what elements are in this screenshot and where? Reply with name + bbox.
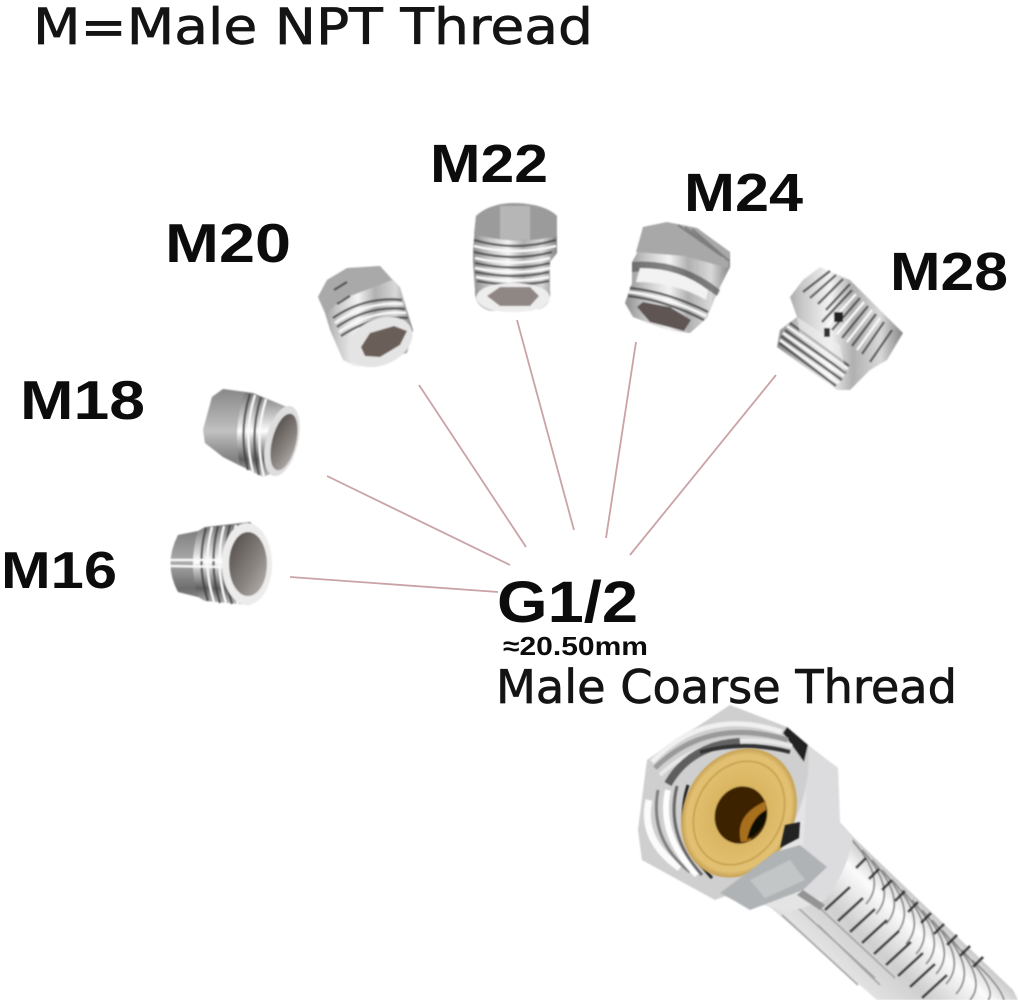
braided hose (745, 823, 1018, 1000)
label: M16: M16 (1, 542, 117, 600)
label: M28: M28 (890, 242, 1008, 302)
label: M22: M22 (430, 134, 548, 194)
label: Male Coarse Thread: Male Coarse Thread (496, 660, 957, 714)
fitting: M20 (318, 266, 420, 377)
nut inner threads (647, 724, 792, 878)
fitting: M24 (625, 222, 730, 333)
hose with nut (638, 705, 1018, 1000)
label: M20: M20 (165, 212, 291, 274)
fitting: M16 (170, 522, 272, 605)
fitting: M28 (777, 267, 903, 390)
fitting: M22 (473, 203, 557, 312)
label: M24: M24 (684, 163, 803, 223)
brass insert (659, 728, 819, 898)
lower hex facet (720, 822, 827, 910)
label: approx diameter: ≈20.50mm (503, 631, 648, 661)
fitting: M18 (203, 389, 306, 480)
label: M18: M18 (20, 369, 145, 431)
hex nut (638, 705, 853, 912)
label: G1/2: G1/2 (497, 570, 638, 635)
connector lines (290, 320, 776, 592)
